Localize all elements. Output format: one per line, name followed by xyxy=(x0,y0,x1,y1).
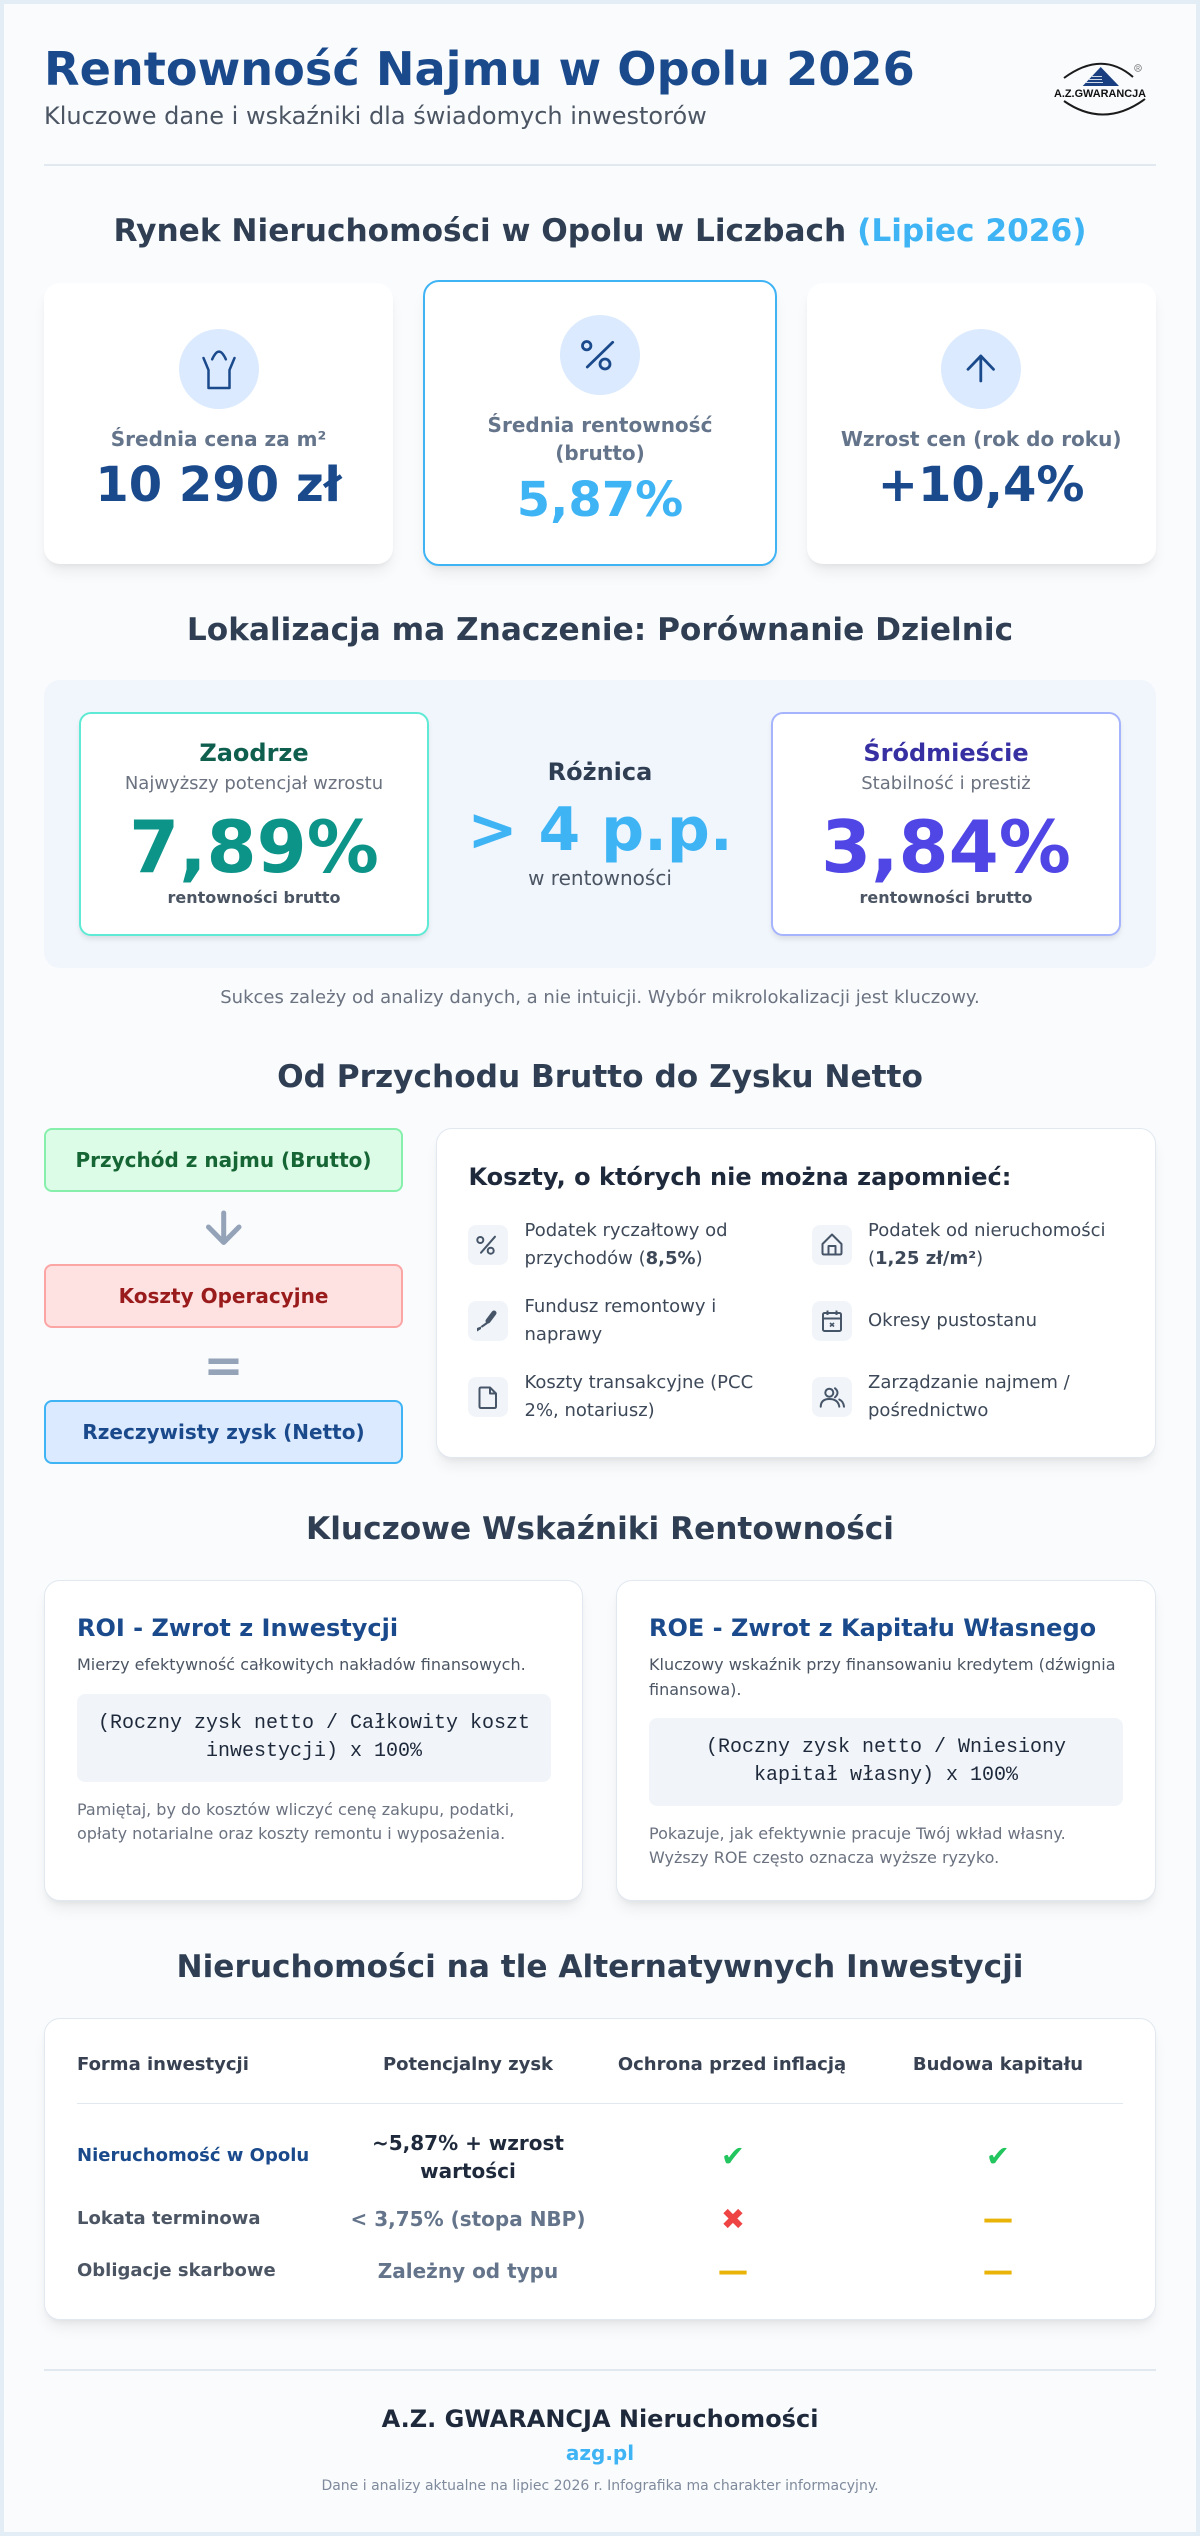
ROE note xyxy=(649,1824,1066,1867)
arrow: down xyxy=(206,1210,242,1245)
item: flat tax: Podatek ryczałtowy od xyxy=(524,1220,728,1241)
item: vacancy xyxy=(812,1301,1037,1341)
card: Zaodrze: rentowności brutto xyxy=(167,888,341,907)
footer xyxy=(321,2405,879,2494)
row: term deposit: — xyxy=(983,2202,1013,2237)
panel title: Koszty, o których nie można zapomnieć: xyxy=(468,1163,1011,1191)
row: real estate xyxy=(77,2131,1010,2183)
card: Zaodrze: Najwyższy potencjał wzrostu xyxy=(125,773,383,794)
card: Śródmieście: Stabilność i prestiż xyxy=(861,773,1031,794)
item: transaction costs: 2%, notariusz) xyxy=(524,1400,655,1421)
logo: A.Z. Gwarancja xyxy=(1054,62,1146,116)
label: (brutto) xyxy=(555,441,645,465)
box: net profit: Rzeczywisty zysk (Netto) xyxy=(82,1420,365,1444)
heading: key indicators: Kluczowe Wskaźniki Rentowności xyxy=(306,1511,894,1547)
ROE description: Kluczowy wskaźnik przy finansowaniu kredytem (dźwignia xyxy=(649,1655,1116,1674)
company name: A.Z. GWARANCJA Nieruchomości xyxy=(382,2405,818,2433)
row: real estate: ✔ xyxy=(986,2139,1010,2173)
card: Zaodrze: Zaodrze xyxy=(199,739,309,767)
item: management xyxy=(812,1372,1070,1421)
icon: house xyxy=(812,1225,852,1265)
logo: A.Z. Gwarancja: A.Z.GWARANCJA xyxy=(1054,88,1146,100)
icon: percent xyxy=(560,315,640,395)
ROI formula: inwestycji) x 100% xyxy=(206,1740,422,1763)
ROI formula: (Roczny zysk netto / Całkowity koszt xyxy=(98,1712,530,1735)
table header: Forma inwestycji xyxy=(77,2054,249,2075)
difference callout xyxy=(467,758,733,890)
row: real estate: Nieruchomość w Opolu xyxy=(77,2145,309,2166)
label xyxy=(488,413,712,465)
table header: Budowa kapitału xyxy=(913,2054,1083,2075)
difference callout: w rentowności xyxy=(528,866,672,890)
item: flat tax: przychodów (8,5%) xyxy=(524,1248,703,1269)
icon: arrow up xyxy=(941,329,1021,409)
logo: A.Z. Gwarancja: R xyxy=(1136,66,1140,72)
card: Śródmieście: rentowności brutto xyxy=(859,888,1033,907)
ROI note xyxy=(77,1800,514,1843)
box: gross revenue: Przychód z najmu (Brutto) xyxy=(75,1148,372,1172)
panel: costs xyxy=(436,1128,1156,1458)
item: renovation fund: naprawy xyxy=(524,1324,602,1345)
panel: ROI xyxy=(44,1580,583,1901)
row: treasury bonds xyxy=(77,2254,1013,2289)
item: property tax xyxy=(812,1220,1106,1269)
label: Wzrost cen (rok do roku) xyxy=(841,427,1121,451)
website: azg.pl xyxy=(566,2441,634,2465)
ROE description: finansowa). xyxy=(649,1680,742,1699)
ROI note: Pamiętaj, by do kosztów wliczyć cenę zakupu, podatki, xyxy=(77,1800,514,1819)
item: transaction costs xyxy=(468,1372,753,1421)
row: treasury bonds: — xyxy=(983,2254,1013,2289)
ROI note: opłaty notarialne oraz koszty remontu i wyposażenia. xyxy=(77,1824,505,1843)
item: transaction costs: Koszty transakcyjne (PCC xyxy=(524,1372,753,1393)
box: net profit xyxy=(44,1400,403,1464)
heading: alternatives: Nieruchomości na tle Alternatywnych Inwestycji xyxy=(177,1949,1023,1985)
panel: district comparison xyxy=(44,680,1156,968)
ROI title: ROI - Zwrot z Inwestycji xyxy=(77,1614,398,1642)
ROE formula: (Roczny zysk netto / Wniesiony xyxy=(706,1736,1066,1759)
table header: Potencjalny zysk xyxy=(383,2054,553,2075)
title: Rentowność Najmu w Opolu 2026 xyxy=(44,42,915,96)
row: real estate: wartości xyxy=(420,2159,516,2183)
ROE formula xyxy=(649,1718,1123,1806)
caption: Sukces zależy od analizy danych, a nie intuicji. Wybór mikrolokalizacji jest kluczowy. xyxy=(220,987,980,1008)
box: operating costs: Koszty Operacyjne xyxy=(119,1284,328,1308)
item: renovation fund xyxy=(468,1296,716,1345)
ROE description xyxy=(649,1655,1116,1699)
item: renovation fund: Fundusz remontowy i xyxy=(524,1296,716,1317)
panel: price growth xyxy=(807,283,1156,564)
icon: people xyxy=(812,1377,852,1417)
item: property tax: Podatek od nieruchomości xyxy=(868,1220,1106,1241)
row: real estate: ✔ xyxy=(721,2139,745,2173)
panel: comparison table xyxy=(44,2018,1156,2320)
item: management: Zarządzanie najmem / xyxy=(868,1372,1070,1393)
footer divider xyxy=(44,2369,1156,2371)
disclaimer: Dane i analizy aktualne na lipiec 2026 r. Infografika ma charakter informacyjny. xyxy=(321,2478,879,2494)
row: treasury bonds: — xyxy=(718,2254,748,2289)
icon: brush xyxy=(468,1301,508,1341)
difference callout: > 4 p.p. xyxy=(467,795,733,865)
card: Śródmieście: 3,84% xyxy=(821,805,1071,889)
item: vacancy: Okresy pustostanu xyxy=(868,1310,1037,1331)
icon: document xyxy=(468,1377,508,1417)
value: 10 290 zł xyxy=(95,457,342,513)
ROE title: ROE - Zwrot z Kapitału Własnego xyxy=(649,1614,1096,1642)
label: Średnia cena za m² xyxy=(111,427,326,451)
row: treasury bonds: Obligacje skarbowe xyxy=(77,2260,276,2281)
icon: percent xyxy=(468,1225,508,1265)
panel: average yield xyxy=(423,280,777,566)
item: flat tax xyxy=(468,1220,728,1269)
ROI description: Mierzy efektywność całkowitych nakładów finansowych. xyxy=(77,1655,526,1674)
row: real estate: ~5,87% + wzrost xyxy=(372,2131,564,2155)
panel: average price xyxy=(44,283,393,564)
card: Zaodrze: 7,89% xyxy=(129,805,379,889)
difference callout: Różnica xyxy=(548,758,652,786)
ROI formula xyxy=(77,1694,551,1782)
table header: Ochrona przed inflacją xyxy=(618,2054,846,2075)
card: Śródmieście xyxy=(771,712,1121,936)
heading: location: Lokalizacja ma Znaczenie: Porównanie Dzielnic xyxy=(187,612,1013,648)
icon: calendar xyxy=(812,1301,852,1341)
row: term deposit: < 3,75% (stopa NBP) xyxy=(350,2207,585,2231)
row: term deposit: ✖ xyxy=(721,2202,745,2236)
item: property tax: (1,25 zł/m²) xyxy=(868,1248,983,1269)
header divider xyxy=(44,164,1156,166)
panel: ROE xyxy=(616,1580,1156,1901)
box: gross revenue xyxy=(44,1128,403,1192)
row: term deposit xyxy=(77,2202,1013,2237)
value: 5,87% xyxy=(517,472,683,528)
item: management: pośrednictwo xyxy=(868,1400,988,1421)
value: +10,4% xyxy=(878,457,1085,513)
label: Średnia rentowność xyxy=(488,413,712,437)
ROE note: Wyższy ROE często oznacza wyższe ryzyko. xyxy=(649,1848,999,1867)
table header xyxy=(77,2054,1083,2075)
subtitle: Kluczowe dane i wskaźniki dla świadomych inwestorów xyxy=(44,102,707,130)
card: Śródmieście: Śródmieście xyxy=(863,739,1029,767)
ROE note: Pokazuje, jak efektywnie pracuje Twój wkład własny. xyxy=(649,1824,1066,1843)
table header rule xyxy=(77,2103,1123,2104)
heading: gross to net: Od Przychodu Brutto do Zysku Netto xyxy=(277,1059,923,1095)
ROE formula: kapitał własny) x 100% xyxy=(754,1764,1018,1787)
row: treasury bonds: Zależny od typu xyxy=(378,2259,558,2283)
box: operating costs xyxy=(44,1264,403,1328)
equals sign: = xyxy=(203,1338,244,1394)
row: term deposit: Lokata terminowa xyxy=(77,2208,261,2229)
heading: market in numbers: Rynek Nieruchomości w Opolu w Liczbach (Lipiec 2026) xyxy=(114,213,1086,249)
icon: building xyxy=(178,329,258,409)
card: Zaodrze xyxy=(79,712,429,936)
